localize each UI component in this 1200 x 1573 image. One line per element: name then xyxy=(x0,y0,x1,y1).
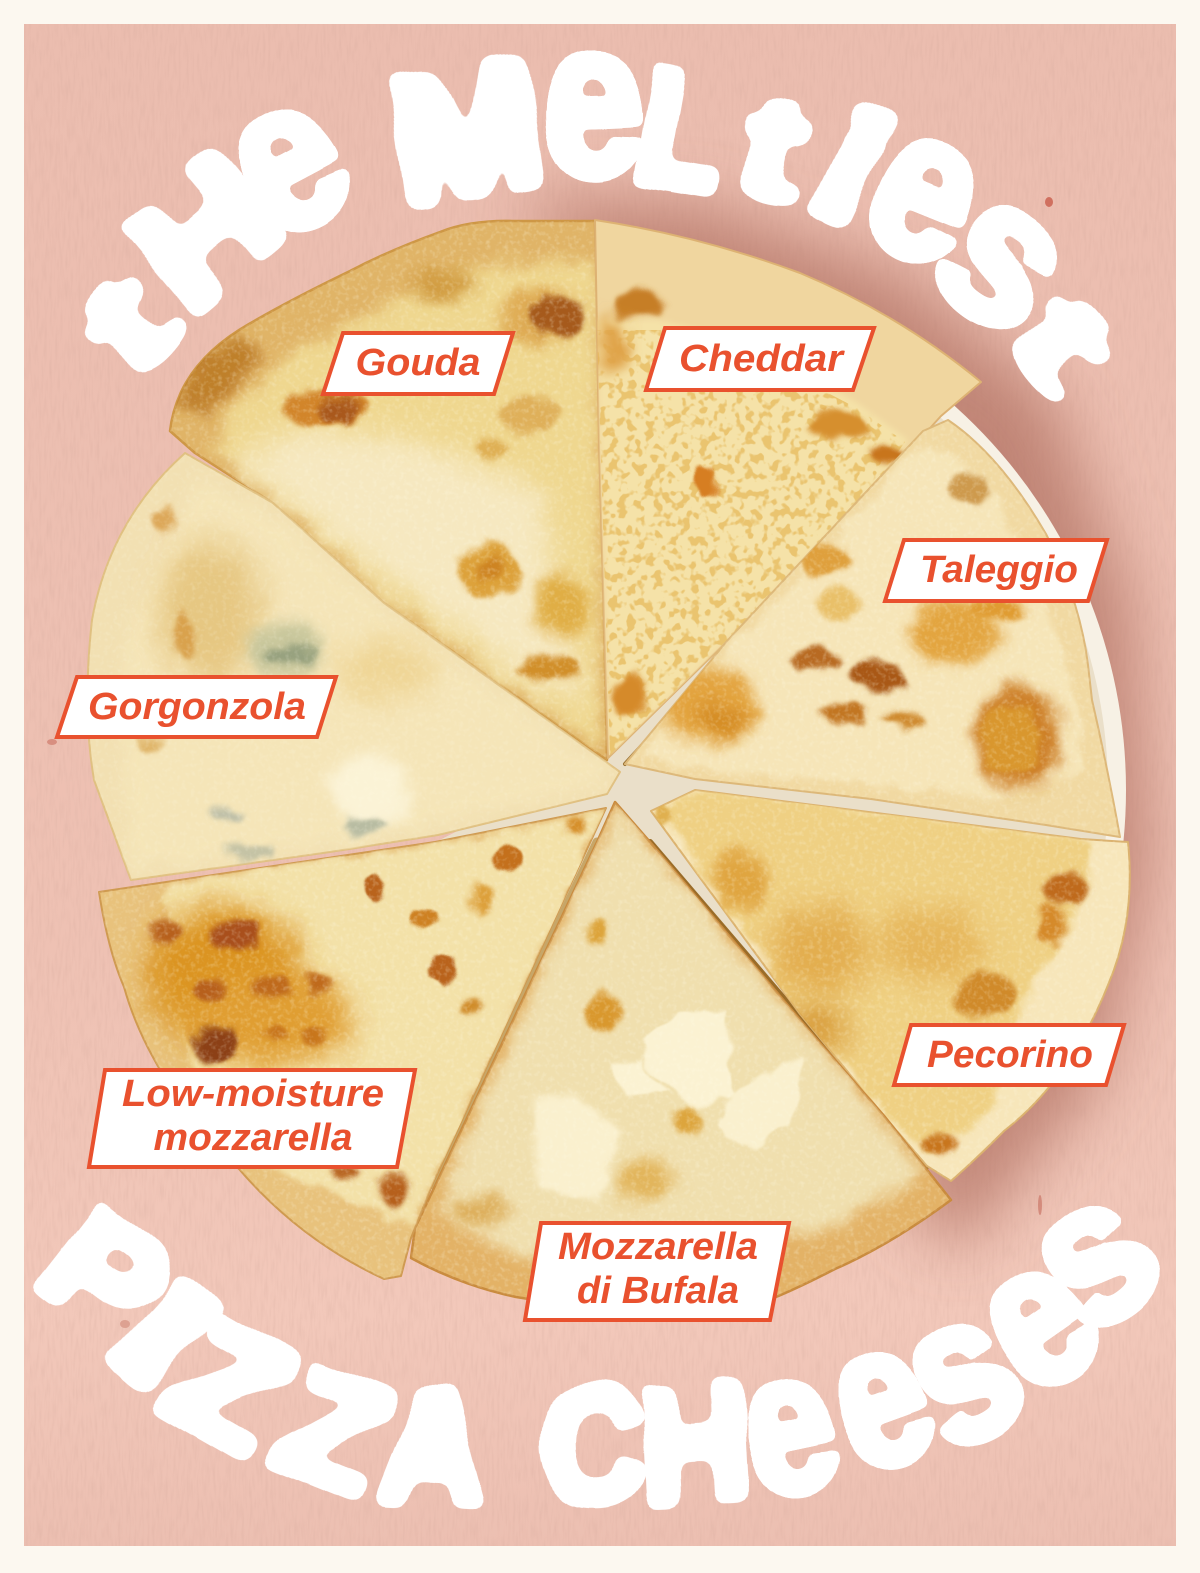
letter s: s xyxy=(899,132,1117,378)
label: Mozzarella di Bufala xyxy=(525,1223,789,1320)
letter Z: Z xyxy=(140,1282,318,1487)
letter A: A xyxy=(376,1356,489,1538)
slice: Gorgonzola xyxy=(87,450,623,885)
letter H: H xyxy=(97,122,313,343)
slice: Taleggio xyxy=(620,420,1120,840)
slice: Low-moisture mozzarella xyxy=(95,805,610,1280)
label: Low-moisture mozzarella: mozzarella xyxy=(154,1117,352,1159)
label: Mozzarella di Bufala: di Bufala xyxy=(577,1270,739,1312)
letter s: s xyxy=(981,1133,1200,1372)
letter e: e xyxy=(838,60,1019,314)
letter t: t xyxy=(983,267,1139,414)
slice: Mozzarella di Bufala xyxy=(410,800,955,1310)
label: Gouda xyxy=(323,333,513,394)
letter H: H xyxy=(636,1351,754,1535)
letter i: i xyxy=(791,77,910,258)
letter I: I xyxy=(82,1248,245,1420)
slice: Pecorino xyxy=(650,790,1130,1190)
slice: Gouda xyxy=(161,221,610,761)
letter e: e xyxy=(720,1304,857,1542)
letter e: e xyxy=(798,1275,960,1517)
label: Low-moisture mozzarella xyxy=(89,1070,415,1167)
label: Low-moisture mozzarella: Low-moisture xyxy=(122,1073,384,1115)
letter e: e xyxy=(930,1196,1138,1435)
letter Z: Z xyxy=(256,1334,410,1528)
letter C: C xyxy=(536,1355,648,1536)
label: Gorgonzola xyxy=(57,677,336,737)
label: Gouda: Gouda xyxy=(356,342,480,384)
label: Taleggio: Taleggio xyxy=(920,549,1078,591)
label: Cheddar: Cheddar xyxy=(679,338,845,380)
pizza cast shadow xyxy=(520,200,1150,1250)
letter s: s xyxy=(860,1247,1059,1494)
letter P: P xyxy=(13,1177,198,1371)
label: Pecorino: Pecorino xyxy=(927,1034,1093,1076)
label: Pecorino xyxy=(894,1025,1124,1085)
label: Mozzarella di Bufala: Mozzarella xyxy=(558,1226,758,1268)
letter t: t xyxy=(50,252,203,399)
plate xyxy=(432,406,1126,1190)
letter L: L xyxy=(625,31,740,227)
label: Gorgonzola: Gorgonzola xyxy=(88,686,306,728)
letter e: e xyxy=(184,28,385,284)
label: Cheddar xyxy=(646,328,874,390)
letter M: M xyxy=(380,23,553,240)
slice: Cheddar xyxy=(595,220,981,760)
slice gaps xyxy=(280,300,927,1186)
title: The Meltiest xyxy=(50,0,1139,414)
pizza on plate xyxy=(87,220,1130,1310)
label: Taleggio xyxy=(885,540,1107,601)
letter t: t xyxy=(728,65,816,232)
title: Pizza Cheeses xyxy=(13,1133,1200,1542)
